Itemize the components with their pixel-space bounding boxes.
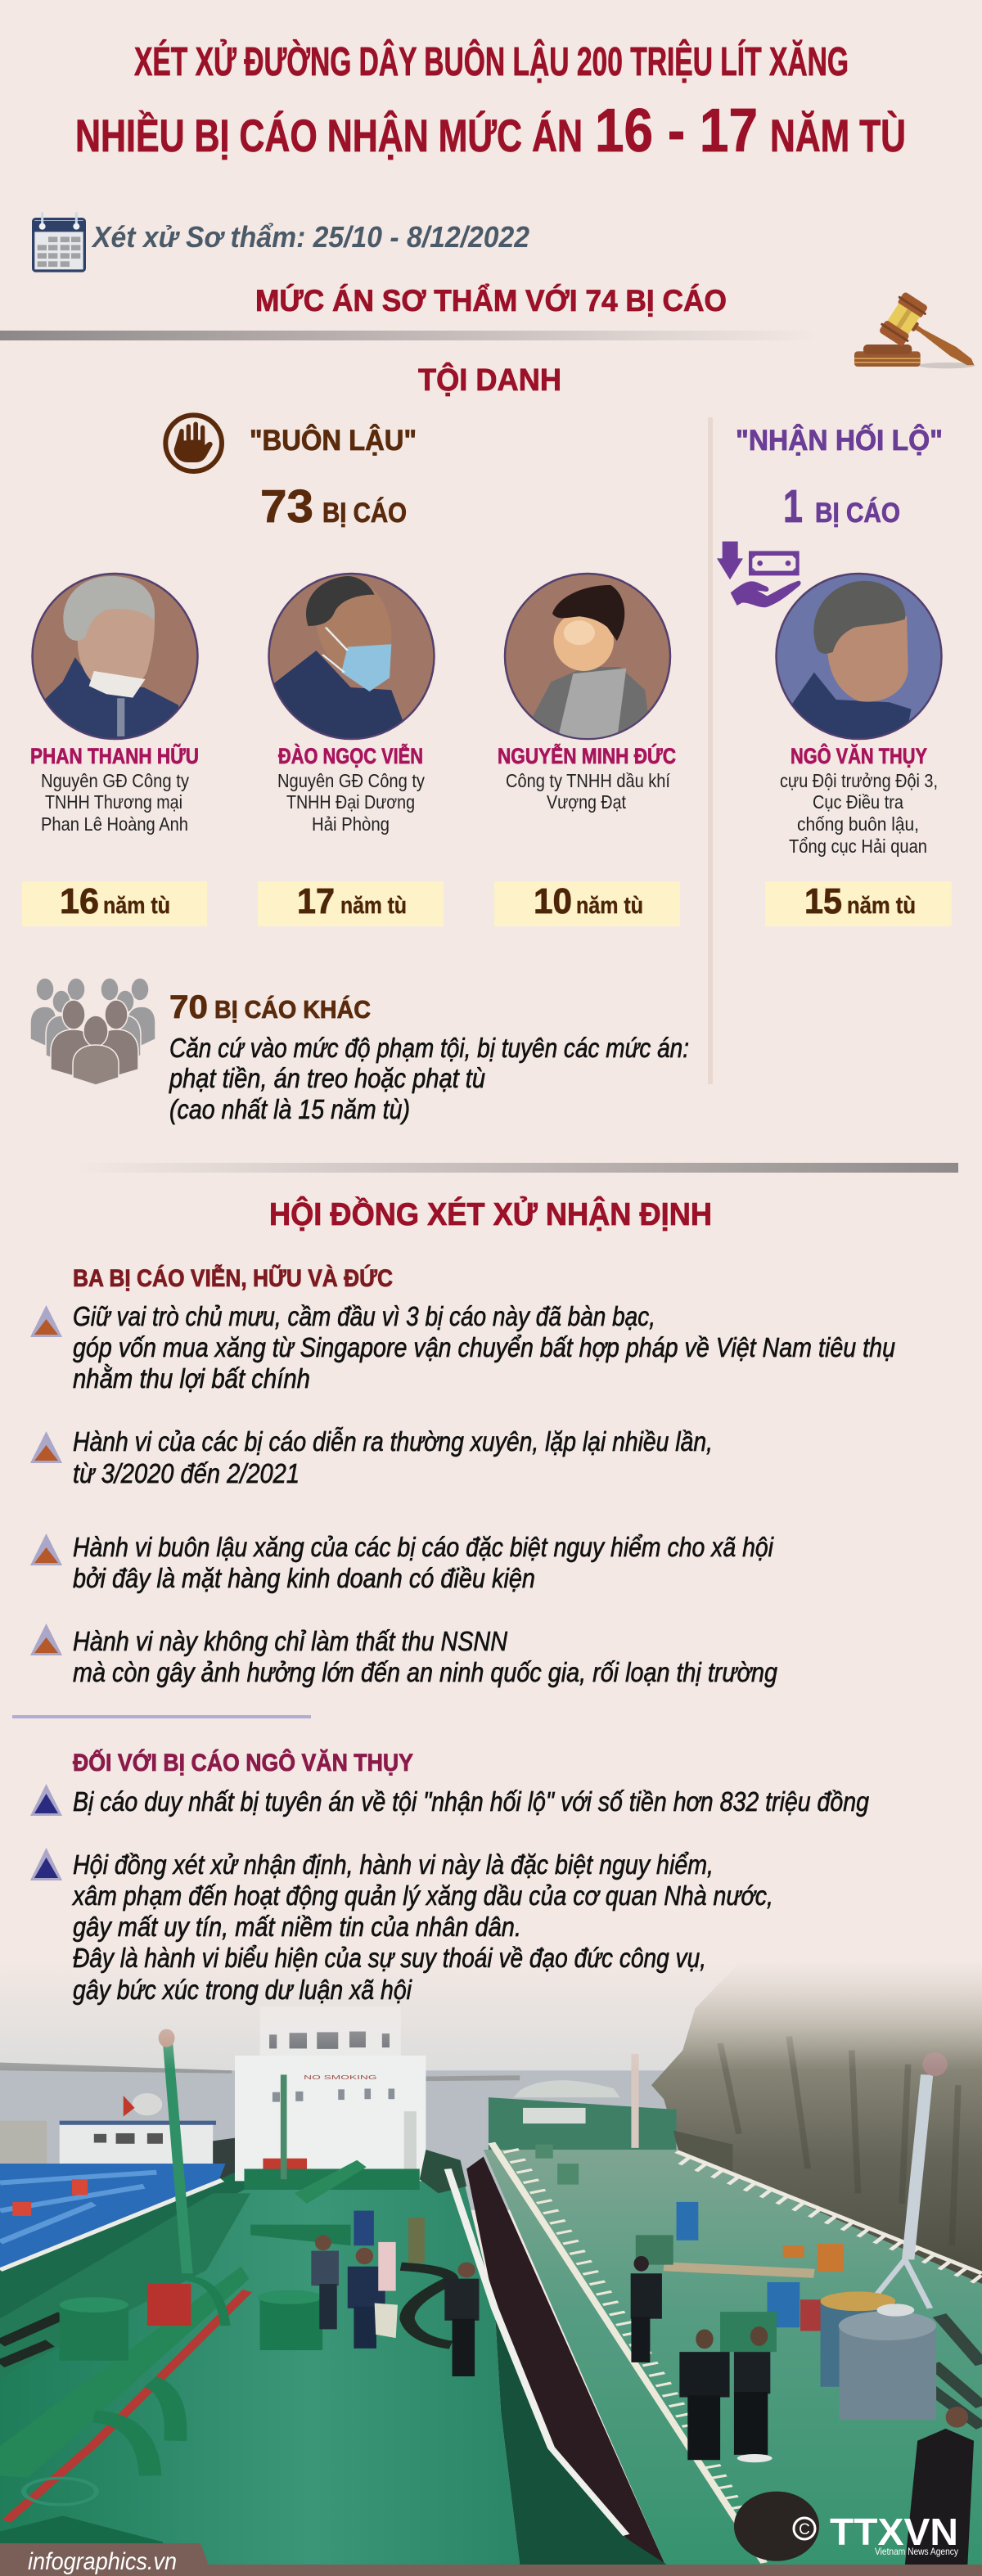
icon: group of people [30,978,155,1085]
photo: oil tankers [0,1960,982,2565]
sentence: 16 years [22,881,207,926]
logo: TTXVN [794,2511,958,2557]
deck rail [448,2168,626,2535]
far ship structure [489,2097,677,2151]
bullet 2: xâm phạm đến hoạt động quản lý xăng dầu của cơ quan Nhà nước, [71,1880,773,1911]
charge label bribery: "NHẬN HỐI LỘ" [736,424,943,457]
defendant count 1: BỊ CÁO [815,498,900,529]
left deck [0,2179,520,2565]
name: Đào Ngọc Viễn and role: Nguyên GĐ Công ty [277,770,425,791]
name: Ngô Văn Thụy and role: chống buôn lậu, [797,813,919,835]
photo fade [0,1960,982,2070]
bullet 4: mà còn gây ảnh hưởng lớn đến an ninh quốc gia, rối loạn thị trường [73,1657,778,1687]
portrait: Ngô Văn Thụy [776,574,941,741]
name: Phan Thanh Hữu and role: TNHH Thương mại [45,791,182,813]
portrait: Đào Ngọc Viễn [268,574,434,741]
other defendants text: Căn cứ vào mức độ phạm tội, bị tuyên các mức án: [169,1033,689,1063]
other defendants text: phạt tiền, án treo hoặc phạt tù [169,1063,485,1093]
footer band with site name [0,2543,982,2576]
defendant count 1 [783,480,900,533]
sentence: 15 years: năm tù [847,893,916,919]
panel: bribery charge [717,424,943,607]
name: Nguyễn Minh Đức and role [498,743,676,813]
defendant count 73: BỊ CÁO [322,498,407,529]
photo: oil tankers: NO SMOKING [304,2074,377,2081]
bullet 1: Giữ vai trò chủ mưu, cầm đầu vì 3 bị cáo này đã bàn bạc, [73,1301,655,1331]
sentence: 10 years: năm tù [576,893,643,919]
name: Nguyễn Minh Đức and role: Vượng Đạt [547,791,627,813]
tree line [651,1963,982,2287]
name: Nguyễn Minh Đức and role: NGUYỄN MINH ĐỨC [498,743,676,768]
portrait: Nguyễn Minh Đức (avatar) [505,574,670,741]
bullet 2: gây mất uy tín, mất niềm tin của nhân dân. [73,1912,521,1942]
blue barge and cabins [0,2121,47,2164]
right deck [484,2150,982,2565]
name: Phan Thanh Hữu and role [30,743,199,835]
sentence: 10 years: 10 [534,881,572,921]
section: Ngô Văn Thụy [30,1749,870,2005]
sentence: 17 years [258,881,444,926]
name: Ngô Văn Thụy and role [780,743,938,857]
subheading: BA BỊ CÁO VIỄN, HỮU VÀ ĐỨC [73,1264,393,1292]
pipes [0,2267,250,2478]
defendant count 73 [260,480,407,533]
heading: court assessment: HỘI ĐỒNG XÉT XỬ NHẬN ĐỊNH [269,1196,712,1232]
heading: sentences: MỨC ÁN SƠ THẨM VỚI 74 BỊ CÁO [255,283,727,317]
name: Đào Ngọc Viễn and role: TNHH Đại Dương [286,791,415,813]
bullet 4: Hành vi này không chỉ làm thất thu NSNN [73,1626,507,1656]
hull [466,2157,665,2565]
name: Phan Thanh Hữu and role: Nguyên GĐ Công ty [41,770,189,791]
bullet 3: bởi đây là mặt hàng kinh doanh có điều kiện [73,1563,535,1593]
white superstructure [260,2006,401,2057]
portrait: Phan Thanh Hữu [33,574,198,741]
icon: money in hand [717,542,801,607]
icon: stop hand [165,415,222,471]
section: three defendants [30,1264,895,1687]
heading: charges: TỘI DANH [418,361,561,398]
bullet 3 [30,1532,774,1593]
sentence: 16 years: năm tù [103,893,170,919]
logo: TTXVN: C [799,2521,810,2538]
sentence: 15 years [765,881,952,926]
name: Đào Ngọc Viễn and role: ĐÀO NGỌC VIỄN [278,743,423,768]
bullet 2: Hành vi của các bị cáo diễn ra thường xuyên, lặp lại nhiều lần, [73,1426,713,1457]
mast [163,2043,193,2273]
logo: TTXVN: Vietnam News Agency [875,2546,958,2557]
other defendants text: (cao nhất là 15 năm tù) [169,1094,410,1124]
green tanks [60,2305,128,2361]
bullet 1: nhằm thu lợi bất chính [73,1363,310,1394]
name: Đào Ngọc Viễn and role [277,743,425,835]
bullet 4 [30,1624,778,1687]
name: Ngô Văn Thụy and role: NGÔ VĂN THỤY [791,743,927,768]
title line 2: NĂM TÙ [770,110,906,161]
bullet 3: Hành vi buôn lậu xăng của các bị cáo đặc biệt nguy hiểm cho xã hội [73,1532,774,1562]
sentence: 10 years [494,881,680,926]
title line 2 [75,96,906,164]
sentence: 17 years: năm tù [340,893,407,919]
sentence: 15 years: 15 [804,881,842,921]
bullet 1: Bị cáo duy nhất bị tuyên án về tội "nhận hối lộ" với số tiền hơn 832 triệu đồng [73,1786,870,1817]
name: Ngô Văn Thụy and role: cựu Đội trưởng Đội 3, [780,770,938,791]
bullet 2: Hội đồng xét xử nhận định, hành vi này là đặc biệt nguy hiểm, [73,1849,714,1880]
other defendants text: BỊ CÁO KHÁC [214,995,371,1024]
panel: smuggling charge [165,415,417,533]
other defendants text [169,989,689,1124]
icon: calendar [32,212,86,272]
sentence: 17 years: 17 [297,881,335,921]
bullet 2: Đây là hành vi biểu hiện của sự suy thoái về đạo đức công vụ, [73,1943,706,1973]
name: Ngô Văn Thụy and role: Cục Điều tra [813,791,903,813]
bullet 2 [30,1426,713,1488]
footer band with site name: infographics.vn [28,2548,177,2575]
right rails and equipment [492,2142,764,2563]
title line 2: NHIỀU BỊ CÁO NHẬN MỨC ÁN [75,110,583,161]
title block [75,39,906,164]
icon: gavel [854,290,982,385]
charge label: "BUÔN LẬU" [250,424,417,457]
name: Đào Ngọc Viễn and role: Hải Phòng [312,813,390,835]
bullet 2: gây bức xúc trong dư luận xã hội [73,1975,412,2005]
logo: TTXVN: TTXVN [830,2511,958,2553]
officers on right deck [631,2256,974,2565]
trial date: Xét xử Sơ thẩm: 25/10 - 8/12/2022 [91,220,529,254]
defendant count 1: 1 [783,480,803,533]
name: Phan Thanh Hữu and role: Phan Lê Hoàng Anh [41,813,188,835]
other defendants text: 70 [169,989,208,1025]
name: Ngô Văn Thụy and role: Tổng cục Hải quan [789,835,927,857]
sentence: 16 years: 16 [60,881,99,921]
bullet 2 [30,1848,773,2005]
bullet 1 [30,1301,895,1394]
bullet 2: từ 3/2020 đến 2/2021 [73,1458,300,1488]
divider [708,417,713,1084]
title line 2: 16 - 17 [595,96,758,164]
subheading: ĐỐI VỚI BỊ CÁO NGÔ VĂN THỤY [73,1749,413,1777]
people on left deck [311,2211,479,2376]
name: Nguyễn Minh Đức and role: Công ty TNHH dầu khí [506,770,671,791]
name: Phan Thanh Hữu and role: PHAN THANH HỮU [30,743,199,768]
defendant count 73: 73 [260,480,313,533]
